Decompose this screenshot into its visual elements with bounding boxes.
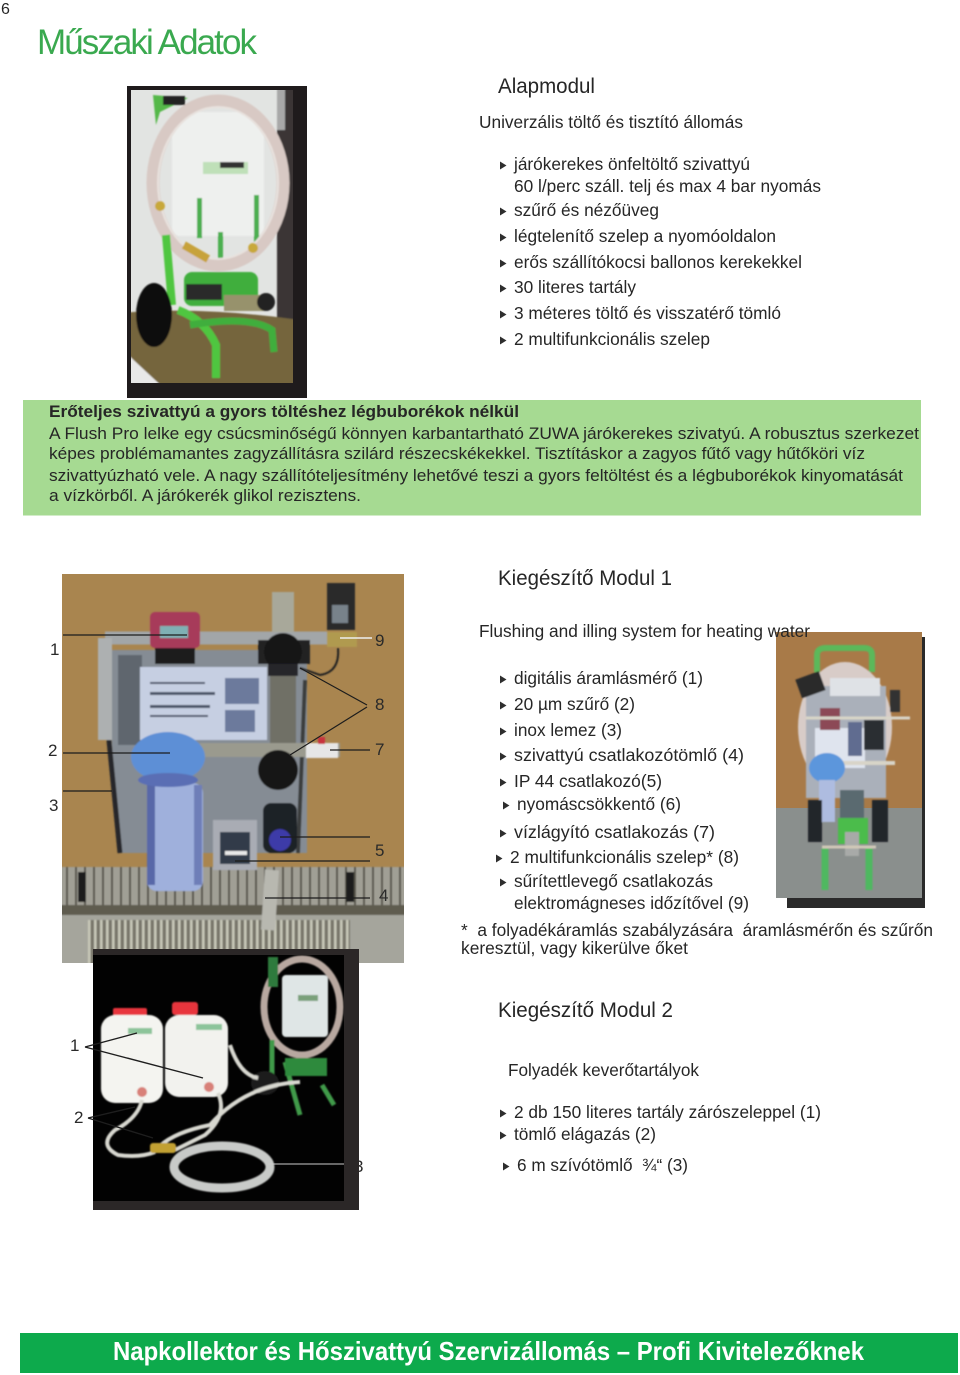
- callout numbers: 8: [375, 695, 384, 714]
- list: base module features: [500, 154, 821, 349]
- callout numbers: 5: [375, 841, 384, 860]
- subheading: module 1: Flushing and illing system for heating water: [479, 621, 810, 641]
- footer banner: [20, 1333, 958, 1373]
- panel text: a vízkörből. A járókerék glikol rezisztens.: [49, 486, 361, 505]
- list: module 1 features: IP 44 csatlakozó(5): [514, 771, 662, 791]
- subheading: base module: Univerzális töltő és tisztító állomás: [479, 112, 743, 132]
- panel heading: Erőteljes szivattyú a gyors töltéshez légbuborékok nélkül: [49, 402, 519, 421]
- callout numbers: 4: [379, 886, 388, 905]
- callout number 3 partly hidden by the photo frame: 3: [354, 1157, 363, 1176]
- callout numbers: 2: [74, 1108, 83, 1127]
- callout numbers: 7: [375, 740, 384, 759]
- panel: pump description: [23, 400, 921, 516]
- list: module 1 features: digitális áramlásmérő (1): [514, 668, 703, 688]
- callout numbers: 3: [49, 796, 58, 815]
- footnote: module 1: * a folyadékáramlás szabályzására áramlásmérőn és szűrőn: [461, 920, 933, 940]
- list: module 1 features: [496, 668, 749, 913]
- list: module 1 features: 20 µm szűrő (2): [514, 694, 635, 714]
- list: base module features: szűrő és nézőüveg: [514, 200, 659, 220]
- callout lines: [63, 635, 370, 898]
- footer banner: Napkollektor és Hőszivattyú Szervizállomás – Profi Kivitelezőknek: [113, 1336, 864, 1366]
- list: base module features: légtelenítő szelep a nyomóoldalon: [514, 226, 776, 246]
- list: base module features: 60 l/perc száll. telj és max 4 bar nyomás: [514, 176, 821, 196]
- photo: base module cart: [120, 80, 307, 398]
- panel text: szivattyúzható vele. A nagy szállítóteljesítmény lehetővé teszi a gyors feltöltést és a légbuborékok kinyomatását: [49, 466, 903, 485]
- subheading: module 2: Folyadék keverőtartályok: [508, 1060, 699, 1080]
- callout numbers: [70, 1036, 83, 1127]
- footnote: module 1: keresztül, vagy kikerülve őket: [461, 938, 688, 958]
- list: module 1 features: sűrítettlevegő csatlakozás: [514, 871, 713, 891]
- photo: mixing tanks with callouts: [70, 949, 363, 1210]
- callout numbers: [48, 631, 388, 905]
- list: module 2 features: 6 m szívótömlő ¾“ (3): [517, 1155, 688, 1175]
- callout numbers: 2: [48, 741, 57, 760]
- page number: 6: [1, 1, 10, 18]
- callout numbers: 1: [50, 640, 59, 659]
- heading: base module: Alapmodul: [498, 75, 595, 98]
- callout numbers: 1: [70, 1036, 79, 1055]
- list: base module features: 2 multifunkcionális szelep: [514, 329, 710, 349]
- list: module 2 features: 2 db 150 literes tartály zárószeleppel (1): [514, 1102, 821, 1122]
- list: module 1 features: nyomáscsökkentő (6): [517, 794, 681, 814]
- list: module 1 features: inox lemez (3): [514, 720, 622, 740]
- list: module 1 features: szivattyú csatlakozótömlő (4): [514, 745, 744, 765]
- panel text: képes problémamantes zagyzállításra szilárd részecskékekkel. Tisztításkor a zagyos fűtő vagy hűtőköri víz: [49, 444, 865, 463]
- list: module 1 features: elektromágneses időzítővel (9): [514, 893, 749, 913]
- list: module 2 features: [500, 1102, 821, 1175]
- list: module 1 features: 2 multifunkcionális szelep* (8): [510, 847, 739, 867]
- panel text: A Flush Pro lelke egy csúcsminőségű könnyen karbantartható ZUWA járókerekes szivatyú. A robusztus szerkezet: [49, 424, 919, 443]
- list: base module features: járókerekes önfeltöltő szivattyú: [513, 154, 750, 174]
- callout lines: [85, 1033, 203, 1138]
- heading: module 2: Kiegészítő Modul 2: [498, 999, 673, 1022]
- title: Műszaki Adatok: [37, 23, 258, 62]
- list: module 1 features: vízlágyító csatlakozás (7): [514, 822, 715, 842]
- list: base module features: erős szállítókocsi ballonos kerekekkel: [514, 252, 802, 272]
- list: base module features: 3 méteres töltő és visszatérő tömló: [514, 303, 781, 323]
- callout numbers: 9: [375, 631, 384, 650]
- photo: cart with module 1: [776, 632, 925, 908]
- list: module 2 features: tömlő elágazás (2): [514, 1124, 656, 1144]
- list: base module features: 30 literes tartály: [514, 277, 636, 297]
- heading: module 1: Kiegészítő Modul 1: [498, 567, 672, 590]
- photo: flushing module with callouts: [48, 574, 420, 975]
- panel text: [49, 424, 919, 505]
- footnote: module 1: [461, 920, 933, 958]
